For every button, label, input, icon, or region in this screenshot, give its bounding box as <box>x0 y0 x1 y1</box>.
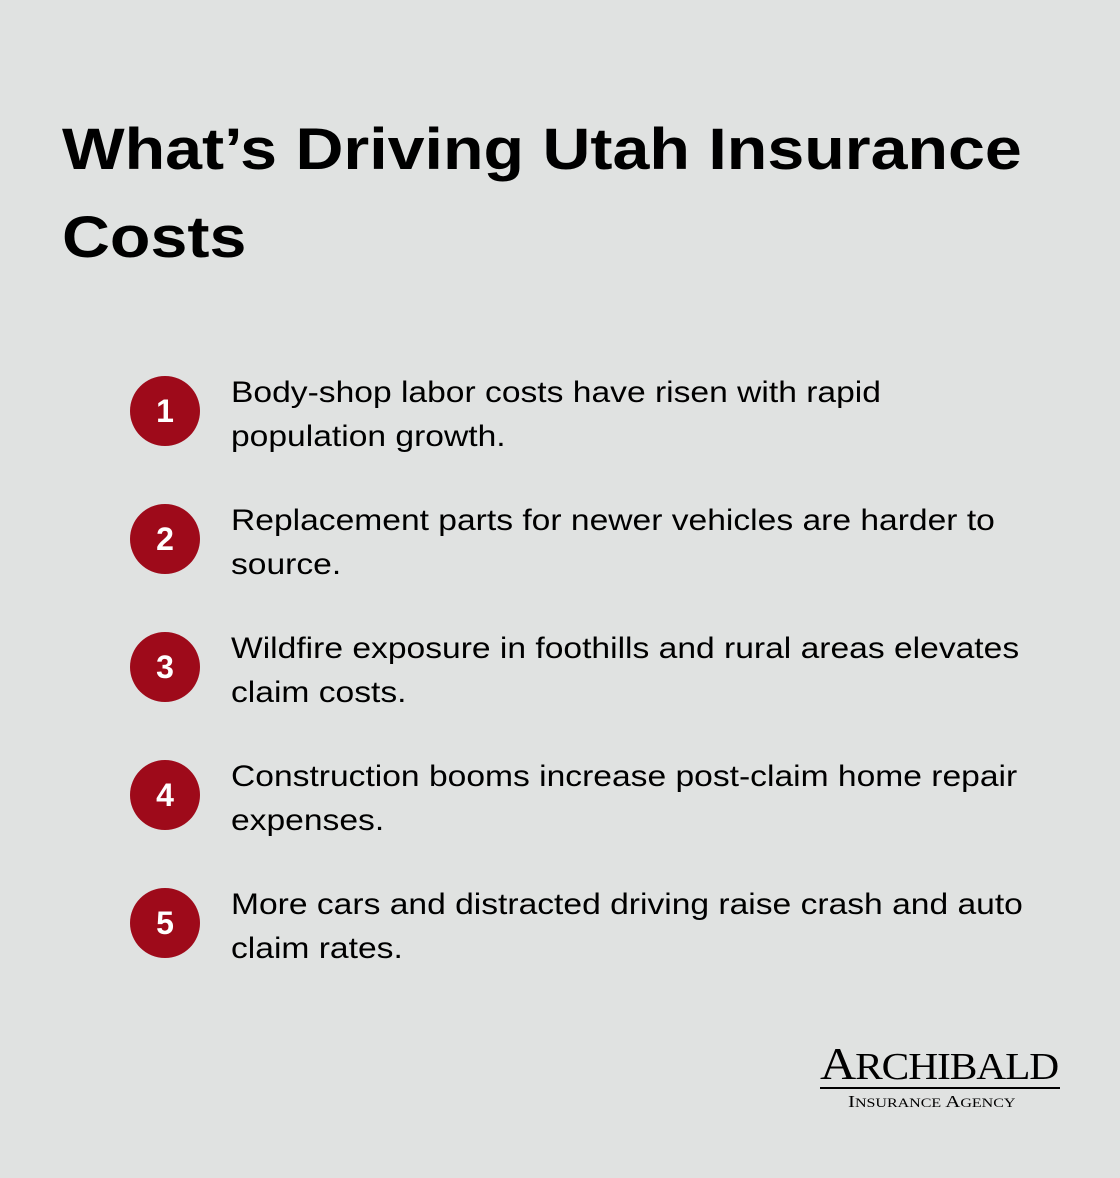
item 5: 5 <box>156 905 174 941</box>
item 2 <box>130 504 995 581</box>
item 4: expenses. <box>231 804 384 837</box>
title <box>62 117 1022 270</box>
item 4: 4 <box>156 777 174 813</box>
item 3: claim costs. <box>231 676 407 709</box>
item 1: Body-shop labor costs have risen with rapid <box>231 376 881 409</box>
item 1: 1 <box>156 393 174 429</box>
item 4: Construction booms increase post-claim home repair <box>231 760 1017 793</box>
item 3: Wildfire exposure in foothills and rural areas elevates <box>231 632 1019 665</box>
item 5 <box>130 888 1023 965</box>
item 4 <box>130 760 1017 837</box>
logo: ARCHIBALD <box>820 1038 1058 1089</box>
item 2: 2 <box>156 521 174 557</box>
item 2: Replacement parts for newer vehicles are harder to <box>231 504 995 537</box>
logo <box>820 1038 1060 1111</box>
item 5: More cars and distracted driving raise crash and auto <box>231 888 1023 921</box>
title: Costs <box>62 205 246 270</box>
item 2: source. <box>231 548 341 581</box>
item 3: 3 <box>156 649 174 685</box>
item 3 <box>130 632 1019 709</box>
title: What’s Driving Utah Insurance <box>62 117 1022 182</box>
item 5: claim rates. <box>231 932 403 965</box>
item 1 <box>130 376 881 453</box>
logo: INSURANCE AGENCY <box>848 1092 1015 1111</box>
item 1: population growth. <box>231 420 506 453</box>
